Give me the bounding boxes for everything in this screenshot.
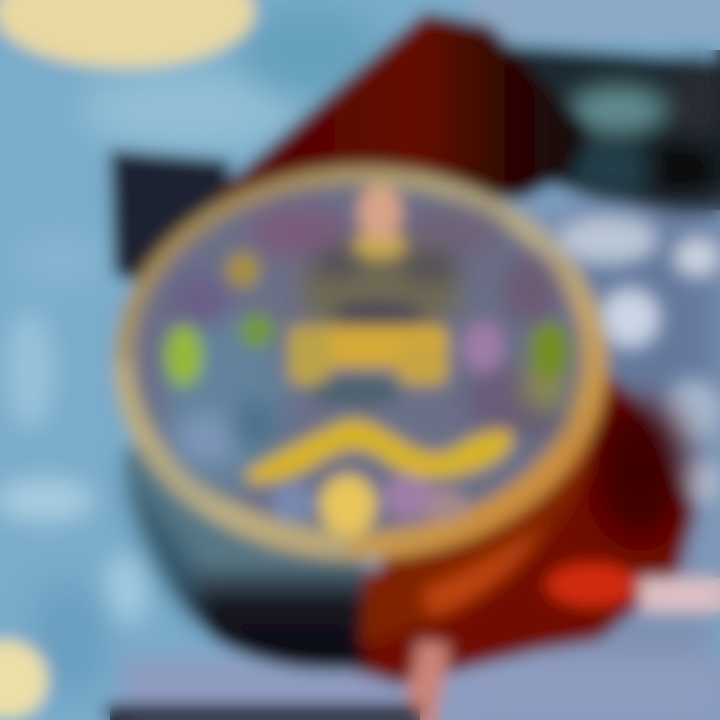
lid rim (114, 166, 608, 560)
green ornament left (165, 325, 203, 387)
red drip under tin (404, 640, 450, 720)
dark red cloth top (220, 12, 590, 205)
dark strip bottom (105, 704, 420, 720)
lid rim pale left side (114, 360, 350, 558)
tin side: left shadow (122, 460, 205, 630)
lower lid panels (271, 475, 467, 523)
cream dish bottom left (0, 640, 48, 720)
lid top medallion (354, 184, 406, 259)
tin side: reflected orange (360, 420, 595, 645)
central gold title (288, 326, 448, 386)
dark navy cloth left (110, 150, 230, 285)
green ornament inner left (239, 314, 275, 348)
yellow banner (245, 419, 513, 484)
lid small yellow ornament (226, 252, 260, 288)
white patches right (558, 215, 720, 504)
lid colour panels (165, 206, 567, 490)
cream dish top left (0, 0, 255, 68)
red cloth lower right (350, 365, 695, 685)
dark inscription below title (310, 377, 402, 407)
bottom yellow medallion (320, 475, 376, 535)
pale strip right (640, 578, 720, 612)
dark band top right (500, 45, 720, 215)
top right pale band (470, 0, 720, 40)
lid face (134, 185, 582, 531)
tin lid (114, 166, 608, 560)
green ornament right (529, 321, 571, 379)
orange glow on tin side (420, 525, 545, 620)
orange highlight on cloth (546, 563, 638, 607)
tin side wall (122, 400, 365, 670)
dark inscription above title (332, 300, 424, 328)
lilac ornament (462, 322, 504, 372)
